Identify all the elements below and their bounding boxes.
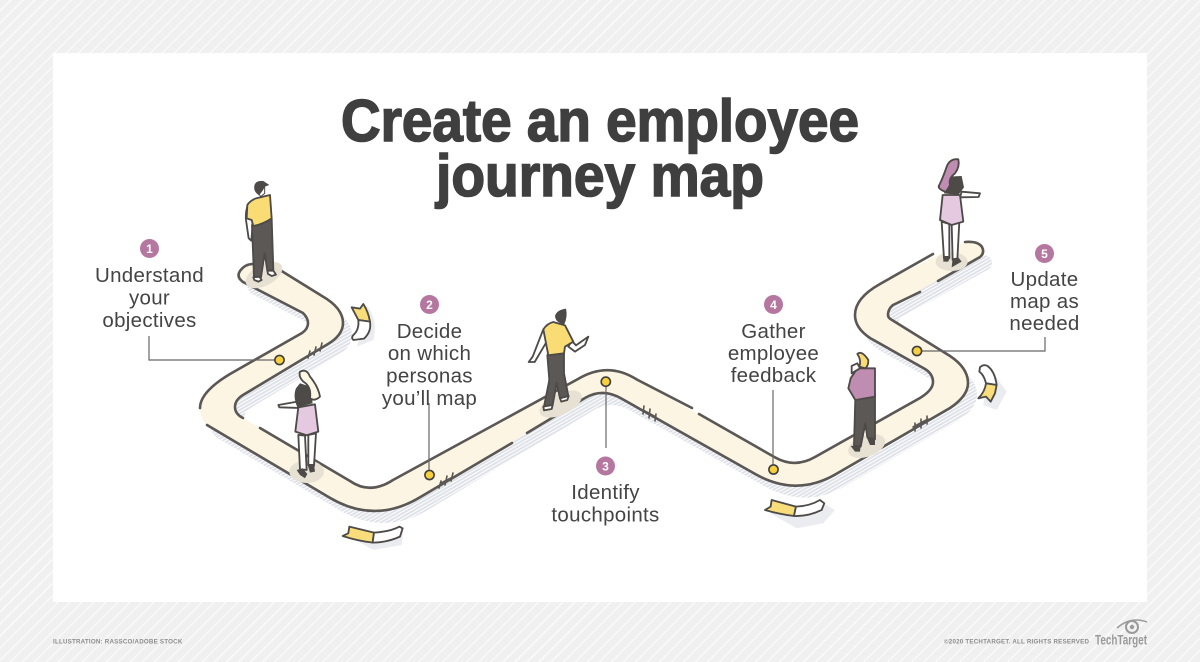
step 5 label: needed [1009, 312, 1080, 335]
copyright: ©2020 TECHTARGET. ALL RIGHTS RESERVED [944, 638, 1089, 646]
step 5 label: map as [1010, 290, 1079, 313]
step 5 label: Update [1011, 268, 1078, 291]
arrow piece: right of first bend [352, 304, 375, 347]
arrow piece: below fourth bend [765, 500, 835, 528]
step 3 label: 3 [602, 459, 609, 473]
leader line: step 4 [772, 390, 774, 469]
step 4 label [728, 295, 819, 387]
step 4 label: Gather [741, 320, 806, 343]
marker dots [275, 346, 922, 480]
step 1 label: 1 [146, 242, 153, 256]
leader line: step 5 [917, 337, 1045, 351]
road surface [200, 242, 983, 511]
step 2 label: you’ll map [382, 387, 477, 410]
TechTarget logo: TechTarget [1095, 632, 1147, 648]
person 3: walking man in yellow shirt [529, 309, 588, 423]
TechTarget logo [1095, 620, 1147, 648]
arrow piece: below second bend [343, 527, 403, 550]
step 2 label [382, 295, 477, 410]
step 1 label: objectives [102, 309, 197, 332]
step 3 label: touchpoints [551, 504, 660, 526]
person 4: man in mauve shirt [845, 353, 888, 463]
step 5 label [1009, 244, 1080, 335]
title [341, 88, 859, 209]
leader line: step 2 [428, 403, 430, 475]
title: Create an employee [341, 88, 859, 154]
road edge: lower [200, 242, 983, 511]
road edge: upper [235, 254, 933, 488]
arrow piece: right of last bend [978, 365, 1007, 410]
step 2 label: on which [388, 342, 471, 365]
leader line: step 3 [605, 382, 607, 448]
step 2 label: Decide [397, 320, 462, 343]
step 4 label: employee [728, 342, 819, 365]
tick marks [308, 343, 928, 488]
step 1 label: Understand [95, 264, 204, 287]
road [200, 242, 983, 511]
step 2 label: 2 [426, 298, 433, 312]
step 2 label: personas [386, 364, 473, 388]
person 5: woman with mauve hair [936, 159, 980, 271]
illustration credit: ILLUSTRATION: RASSCO/ADOBE STOCK [53, 638, 183, 646]
title: journey map [435, 143, 764, 209]
person 2: woman in pink skirt [278, 371, 324, 483]
step 3 label: Identify [571, 481, 640, 504]
step 1 label: your [129, 286, 170, 310]
step 1 label [95, 239, 204, 332]
white panel [53, 53, 1147, 602]
road shadow [209, 254, 992, 523]
step 5 label: 5 [1041, 247, 1048, 261]
step 4 label: feedback [731, 364, 817, 387]
step 3 label [551, 456, 660, 526]
person 1: standing man in yellow shirt [241, 181, 287, 294]
step 4 label: 4 [770, 298, 777, 312]
leader line: step 1 [149, 336, 279, 360]
